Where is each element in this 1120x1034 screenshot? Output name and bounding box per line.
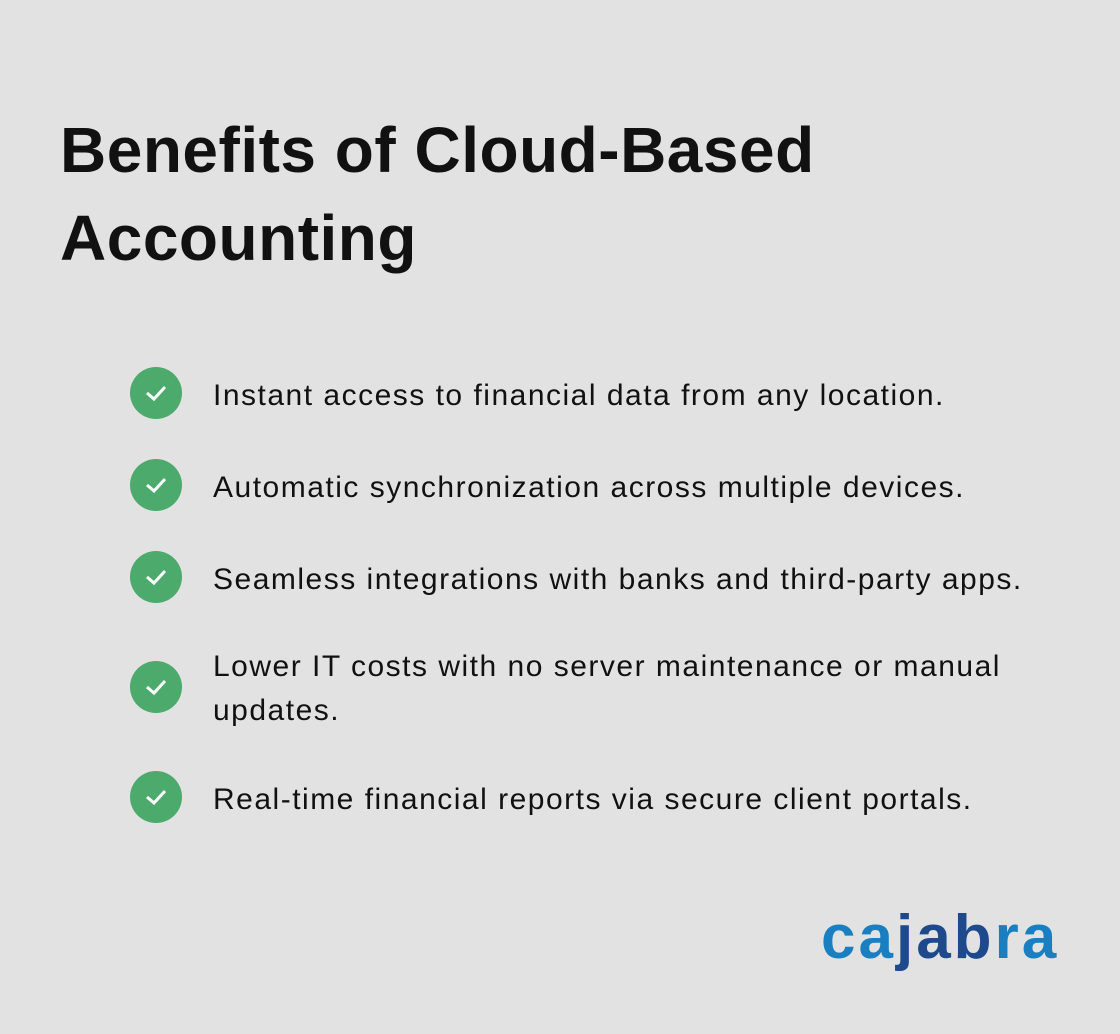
item 4 <box>130 650 1001 727</box>
title <box>60 114 815 274</box>
title: Accounting <box>60 202 417 274</box>
logo: cajabra <box>821 903 1059 972</box>
icon: check <box>130 771 182 823</box>
icon: check <box>130 551 182 603</box>
icon: check <box>130 367 182 419</box>
title: Benefits of Cloud-Based <box>60 114 815 186</box>
text: Lower IT costs with no server maintenance or manual updates. <box>213 650 1001 727</box>
text: Real-time financial reports via secure client portals. <box>213 783 973 816</box>
icon: check <box>130 661 182 713</box>
text: Instant access to financial data from any location. <box>213 379 945 412</box>
item 1 <box>130 367 945 419</box>
item 2 <box>130 459 965 511</box>
icon: check <box>130 459 182 511</box>
item 5 <box>130 771 973 823</box>
text: Automatic synchronization across multiple devices. <box>213 471 965 504</box>
item 3 <box>130 551 1023 603</box>
text: Seamless integrations with banks and third-party apps. <box>213 563 1023 596</box>
